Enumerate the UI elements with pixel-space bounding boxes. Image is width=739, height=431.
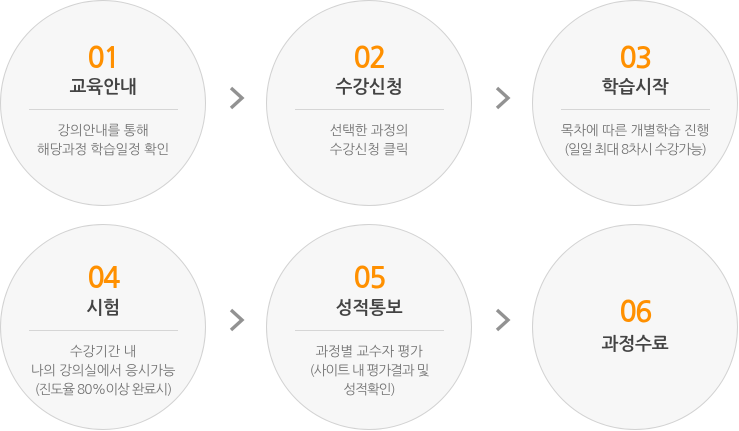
step number 01: 01 [87, 45, 119, 73]
step description: 선택한 과정의 [330, 123, 408, 137]
step description [31, 344, 175, 396]
step number 03: 03 [619, 45, 651, 73]
arrow 3 [230, 308, 244, 332]
step description: (일일 최대 8차시 수강가능) [564, 142, 706, 156]
step description [37, 123, 169, 156]
step description [330, 123, 408, 156]
step number 04: 04 [87, 265, 119, 293]
step description: 수강기간 내 [70, 344, 136, 358]
step number 02: 02 [353, 45, 385, 73]
step title: 시험 [86, 299, 120, 317]
step number 06: 06 [619, 299, 651, 327]
step description: (진도율 80%이상 완료시) [35, 382, 171, 396]
step title: 학습시작 [602, 78, 668, 96]
arrow 1 [230, 86, 244, 110]
step 01 circle [0, 0, 206, 206]
step number 05: 05 [353, 265, 385, 293]
step description: 해당과정 학습일정 확인 [37, 142, 169, 156]
step description [310, 344, 429, 396]
step description: 강의안내를 통해 [57, 123, 148, 137]
step 02 circle [266, 0, 472, 206]
step 04 circle [0, 224, 206, 430]
step 06 circle [532, 224, 738, 430]
step 03 circle [532, 0, 738, 206]
step description: 수강신청 클릭 [330, 142, 408, 156]
step description [561, 123, 709, 156]
step 05 circle [266, 224, 472, 430]
step title: 성적통보 [336, 299, 402, 317]
step description: 목차에 따른 개별학습 진행 [561, 123, 709, 137]
arrow 4 [496, 308, 510, 332]
step description: 성적확인) [343, 382, 395, 396]
step description: (사이트 내 평가결과 및 [310, 363, 428, 377]
arrow 2 [496, 86, 510, 110]
step title: 수강신청 [336, 78, 402, 96]
step title: 교육안내 [70, 78, 136, 96]
step description: 과정별 교수자 평가 [315, 344, 423, 358]
step description: 나의 강의실에서 응시가능 [31, 363, 175, 377]
step title: 과정수료 [602, 335, 668, 353]
